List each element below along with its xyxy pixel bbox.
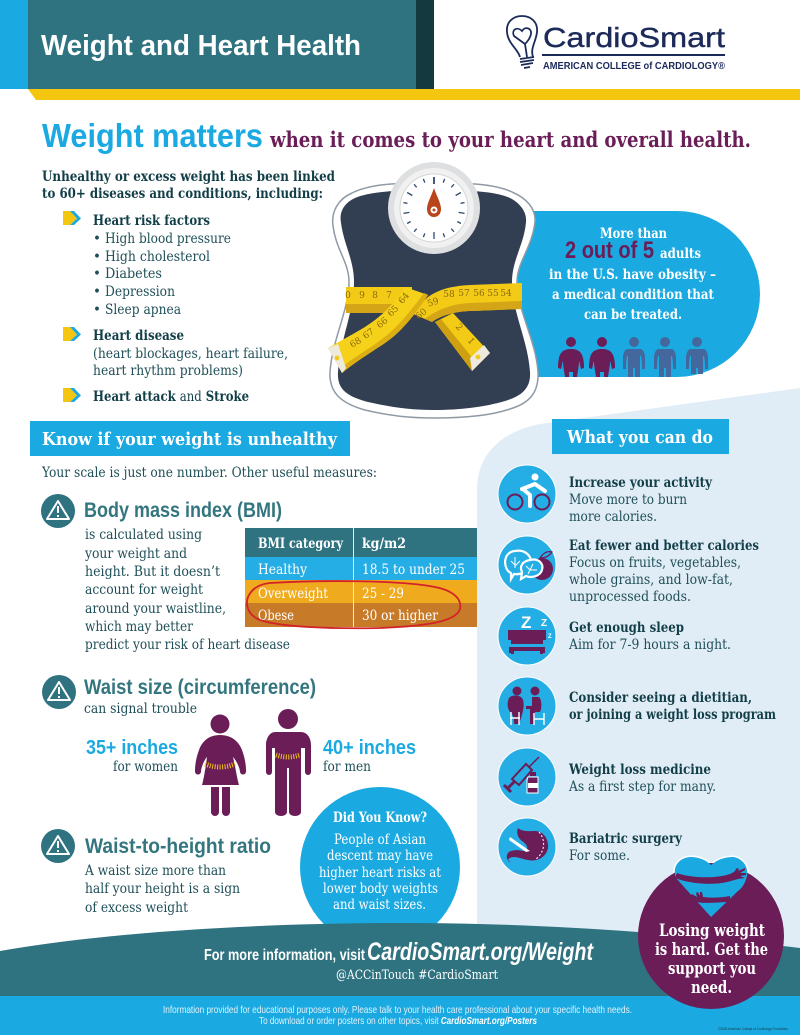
callout: did you know: Did You Know? [333,810,427,826]
callout: losing weight is hard: need. [691,978,732,998]
description: which may better [85,619,193,635]
item: weight loss medicine: Weight loss medicine [568,762,711,778]
women threshold [86,737,178,775]
item: increase your activity: Increase your activity [569,475,713,491]
men threshold: 40+ inches [323,737,416,759]
footer band: disclaimer: Information provided for educational purposes only. Please talk to your health care professional about your specific health needs. [163,1004,632,1016]
item: get enough sleep: Aim for 7-9 hours a night. [568,637,731,653]
item: bariatric surgery: Bariatric surgery [569,831,683,847]
list: heart risk factors: Heart risk factors [93,213,210,229]
callout: losing weight is hard: Losing weight [659,921,765,941]
item: weight loss medicine: As a first step for many. [568,779,716,795]
callout: did you know: People of Asian [334,832,426,848]
item: eat fewer and better calories: Eat fewer and better calories [569,538,759,554]
footer band: more information: CardioSmart.org/Weight [367,938,594,966]
subheading: can signal trouble [84,701,197,717]
callout: 2 out of 5 adults: 2 out of 5 [565,237,654,264]
icon: bed with Zs [498,607,556,665]
heading: Waist-to-height ratio [85,835,271,858]
illustration: bathroom scale with measuring tape [328,162,538,418]
icon: bed with Zs: Z [521,613,531,632]
intro text: to 60+ diseases and conditions, including: [42,186,323,202]
measuring tape: 57 [458,289,470,299]
measuring tape: 55 [487,289,499,299]
section heading: know if your weight is unhealthy: Know if your weight is unhealthy [42,429,337,450]
table: BMI categories [245,528,477,628]
list: heart risk factors [63,211,231,318]
logo: CardioSmart: AMERICAN COLLEGE of CARDIOLOGY® [543,60,725,72]
measuring tape: 8 [372,291,378,301]
headline: Weight matters [42,117,263,154]
icon: warning [41,494,75,528]
callout: losing weight is hard: is hard. Get the [655,940,768,960]
footer band: more information: @ACCinTouch #CardioSmart [336,968,499,983]
intro line: Your scale is just one number. Other useful measures: [41,465,377,481]
measuring tape: 2 [453,322,464,333]
icon: man figure [266,709,311,816]
callout: 2 out of 5 adults [500,211,760,377]
item: eat fewer and better calories: unprocessed foods. [569,589,691,605]
section heading: what you can do: What you can do [566,427,713,448]
measuring tape: 60 [414,307,430,322]
measuring tape: 68 [349,336,364,350]
description: is calculated using [85,527,202,543]
description: your weight and [84,546,187,562]
measuring tape [328,283,522,373]
measuring tape: 54 [500,289,512,299]
measuring tape: 67 [361,327,377,342]
description [84,527,290,653]
callout: did you know [300,787,460,947]
table: BMI categories: Obese [258,608,294,624]
callout: 2 out of 5 adults: a medical condition that [552,287,715,303]
callout: did you know: lower body weights [323,881,438,897]
men threshold [323,737,416,775]
list: heart risk factors: • [93,249,101,265]
section heading: know if your weight is unhealthy [30,421,350,456]
list: heart disease: Heart disease [93,328,184,344]
description: height. But it doesn’t [85,564,221,580]
list: heart disease: (heart blockages, heart failure, [93,346,288,362]
measuring tape: 7 [386,291,392,301]
icon: bicycle [498,465,556,523]
callout: did you know: higher heart risks at [319,865,441,881]
list: heart disease [63,327,288,379]
table: BMI categories: BMI category [258,536,344,552]
list: heart risk factors: • [93,231,101,247]
logo: CardioSmart [507,16,725,72]
footer band: disclaimer: To download or order posters on other topics, visit CardioSmart.org/Posters [259,1015,537,1027]
title: Weight and Heart Health [41,30,361,62]
list: heart risk factors: Diabetes [105,266,162,282]
list: heart risk factors: Depression [105,284,175,300]
description: of excess weight [85,900,189,916]
icon: woman figure [195,714,246,816]
item: eat fewer and better calories [498,536,759,605]
measuring tape: 59 [426,296,441,310]
list: heart risk factors: High blood pressure [105,231,231,247]
women threshold: 35+ inches [86,737,178,759]
highlight ellipse [247,581,460,628]
callout: did you know: and waist sizes. [333,897,426,913]
header banner [0,0,800,100]
icon: five people [558,337,708,377]
icon: greens and apple [498,536,556,594]
dial [388,162,480,254]
item: dietitian or program: Consider seeing a dietitian, [569,690,752,706]
measuring tape: 1 [465,336,476,347]
item: increase your activity [498,465,713,525]
intro text [42,169,335,202]
table: BMI categories: Overweight [258,586,329,602]
callout: losing weight is hard [638,857,784,1009]
list: heart risk factors: High cholesterol [105,249,210,265]
men threshold: for men [323,759,371,775]
description: around your waistline, [85,601,226,617]
table: BMI categories: Healthy [258,562,307,578]
section: waist-to-height ratio [41,829,271,916]
list: heart risk factors: • [93,302,101,318]
logo: CardioSmart: CardioSmart [543,22,725,53]
measuring tape: 66 [375,316,391,331]
heading: Waist size (circumference) [84,676,316,699]
item: dietitian or program [498,677,776,735]
icon: stomach and scalpel [498,818,556,876]
item: bariatric surgery [498,818,683,876]
item: bariatric surgery: For some. [569,848,630,864]
table: BMI categories: 25 - 29 [362,586,404,602]
footer band: disclaimer [0,996,800,1035]
callout: 2 out of 5 adults: adults [660,246,701,262]
description [84,863,240,916]
icon: warning [41,829,75,863]
list: heart risk factors: Sleep apnea [105,302,181,318]
item: get enough sleep: Get enough sleep [569,620,684,636]
headline [42,117,751,154]
item: eat fewer and better calories: whole grains, and low-fat, [569,572,733,588]
measuring tape: 56 [473,289,485,299]
women threshold: for women [113,759,178,775]
item: eat fewer and better calories: Focus on fruits, vegetables, [569,555,741,571]
item: weight loss medicine [498,748,716,806]
section: waist size [42,675,416,816]
measuring tape: 64 [397,291,412,306]
list: heart attack and stroke: Heart attack and Stroke [93,389,249,405]
description: predict your risk of heart disease [85,637,290,653]
description: A waist size more than [84,863,226,879]
item: get enough sleep [498,607,731,665]
panel: what you can do background [477,388,800,955]
footer band: more information: For more information, visit [204,947,365,964]
callout: losing weight is hard: support you [668,959,756,979]
measuring tape: 0 [345,291,351,301]
item: increase your activity: Move more to burn [569,492,687,508]
measuring tape: 58 [443,290,455,300]
list: heart risk factors: • [93,284,101,300]
callout: 2 out of 5 adults: can be treated. [584,307,682,323]
table: BMI categories: kg/m2 [362,536,406,552]
icon: syringe and bottle [498,748,556,806]
list: heart risk factors: • [93,266,101,282]
icon: two seated people [498,677,556,735]
icon: bed with Zs: Z [541,618,547,629]
table: BMI categories: 18.5 to under 25 [362,562,465,578]
footer band: more information [0,923,800,997]
list: heart disease: heart rhythm problems) [93,363,243,379]
icon: warning [42,675,76,709]
item: increase your activity: more calories. [569,509,657,525]
callout: 2 out of 5 adults: More than [600,226,667,242]
table: BMI categories: 30 or higher [362,608,438,624]
icon: heart hugged by arms [675,857,747,917]
callout: did you know: descent may have [327,848,433,864]
section: body mass index [41,494,477,653]
description: account for weight [85,582,204,598]
description: half your height is a sign [85,881,240,897]
icon: bed with Zs: Z [548,634,552,640]
callout: 2 out of 5 adults: in the U.S. have obesity – [549,267,716,283]
section heading: what you can do [552,419,729,454]
measuring tape: 9 [359,291,365,301]
intro text: Unhealthy or excess weight has been linked [42,169,335,185]
heading: Body mass index (BMI) [84,499,282,522]
measuring tape: 65 [386,304,401,319]
